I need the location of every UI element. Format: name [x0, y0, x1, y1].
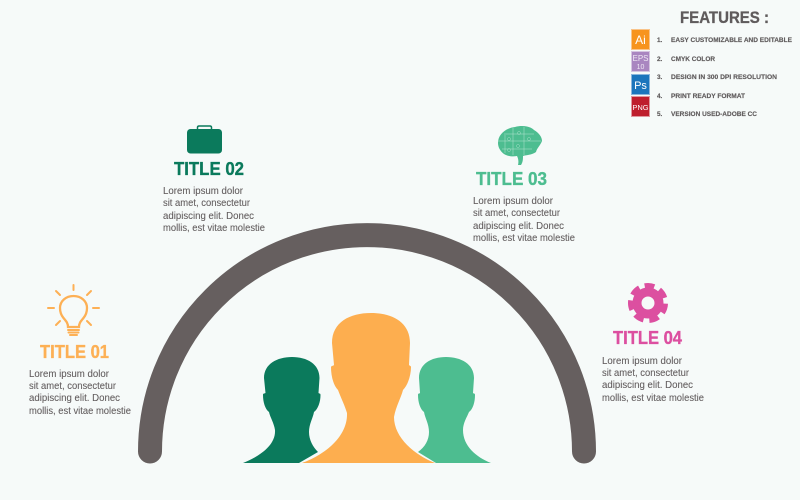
list: features: 2.: [657, 56, 663, 63]
list: features: 1.: [657, 37, 663, 44]
text: description 03: [473, 196, 575, 244]
list: features: DESIGN IN 300 DPI RESOLUTION: [671, 74, 777, 81]
person: orange: [302, 313, 435, 463]
heading: title 03: TITLE 03: [476, 169, 547, 189]
text: description 02: [163, 186, 265, 234]
text: description 02: Lorem ipsum dolor: [163, 186, 244, 197]
text: description 01: Lorem ipsum dolor: [29, 369, 110, 380]
icon: brain: [498, 126, 542, 165]
text: description 04: mollis, est vitae molestie: [602, 393, 704, 404]
text: description 03: Lorem ipsum dolor: [473, 196, 554, 207]
icon: light bulb: [48, 285, 99, 335]
block: title 01: [29, 285, 131, 417]
text: description 01: mollis, est vitae molestie: [29, 406, 131, 417]
text: description 04: adipiscing elit. Donec: [602, 380, 693, 391]
block: title 03: [473, 126, 575, 244]
text: description 03: adipiscing elit. Donec: [473, 221, 564, 232]
people silhouettes: [243, 313, 491, 463]
heading: features: FEATURES :: [680, 9, 769, 27]
heading: title 01: TITLE 01: [40, 342, 109, 362]
arch: [150, 235, 584, 452]
text: description 03: mollis, est vitae molestie: [473, 233, 575, 244]
icon: EPS badge: [632, 52, 650, 72]
icon: Ps badge: Ps: [634, 80, 647, 92]
text: description 03: sit amet, consectetur: [473, 208, 561, 219]
list: features: CMYK COLOR: [671, 56, 715, 63]
text: description 02: adipiscing elit. Donec: [163, 211, 254, 222]
text: description 02: mollis, est vitae molestie: [163, 223, 265, 234]
list: features: 5.: [657, 111, 663, 118]
list: features: PRINT READY FORMAT: [671, 93, 745, 100]
icon: Ai badge: [632, 30, 650, 50]
person: dark green: [243, 357, 320, 463]
list: features: VERSION USED-ADOBE CC: [671, 111, 757, 118]
list: features: [657, 37, 793, 118]
text: description 02: sit amet, consectetur: [163, 198, 251, 209]
icon: EPS badge: EPS: [632, 54, 649, 63]
icon: PNG badge: [632, 96, 650, 116]
icon: Ai badge: Ai: [635, 33, 646, 47]
icon: Ps badge: [632, 74, 650, 94]
text: description 01: adipiscing elit. Donec: [29, 393, 120, 404]
icon: EPS badge: 10: [637, 64, 644, 71]
panel: features: [632, 9, 793, 118]
list: features: 3.: [657, 74, 663, 81]
text: description 04: sit amet, consectetur: [602, 368, 690, 379]
text: description 04: [602, 356, 704, 404]
text: description 04: Lorem ipsum dolor: [602, 356, 683, 367]
block: title 04: [602, 283, 704, 404]
list: features: EASY CUSTOMIZABLE AND EDITABLE: [671, 37, 793, 44]
block: title 02: [163, 126, 265, 234]
person: light green: [418, 357, 491, 463]
text: description 01: sit amet, consectetur: [29, 381, 117, 392]
list: features: 4.: [657, 93, 663, 100]
text: description 01: [29, 369, 131, 417]
icon: gear: [628, 283, 668, 323]
icon: PNG badge: PNG: [632, 103, 649, 112]
heading: title 02: TITLE 02: [174, 159, 244, 179]
heading: title 04: TITLE 04: [613, 328, 682, 348]
icon: briefcase: [187, 126, 222, 154]
